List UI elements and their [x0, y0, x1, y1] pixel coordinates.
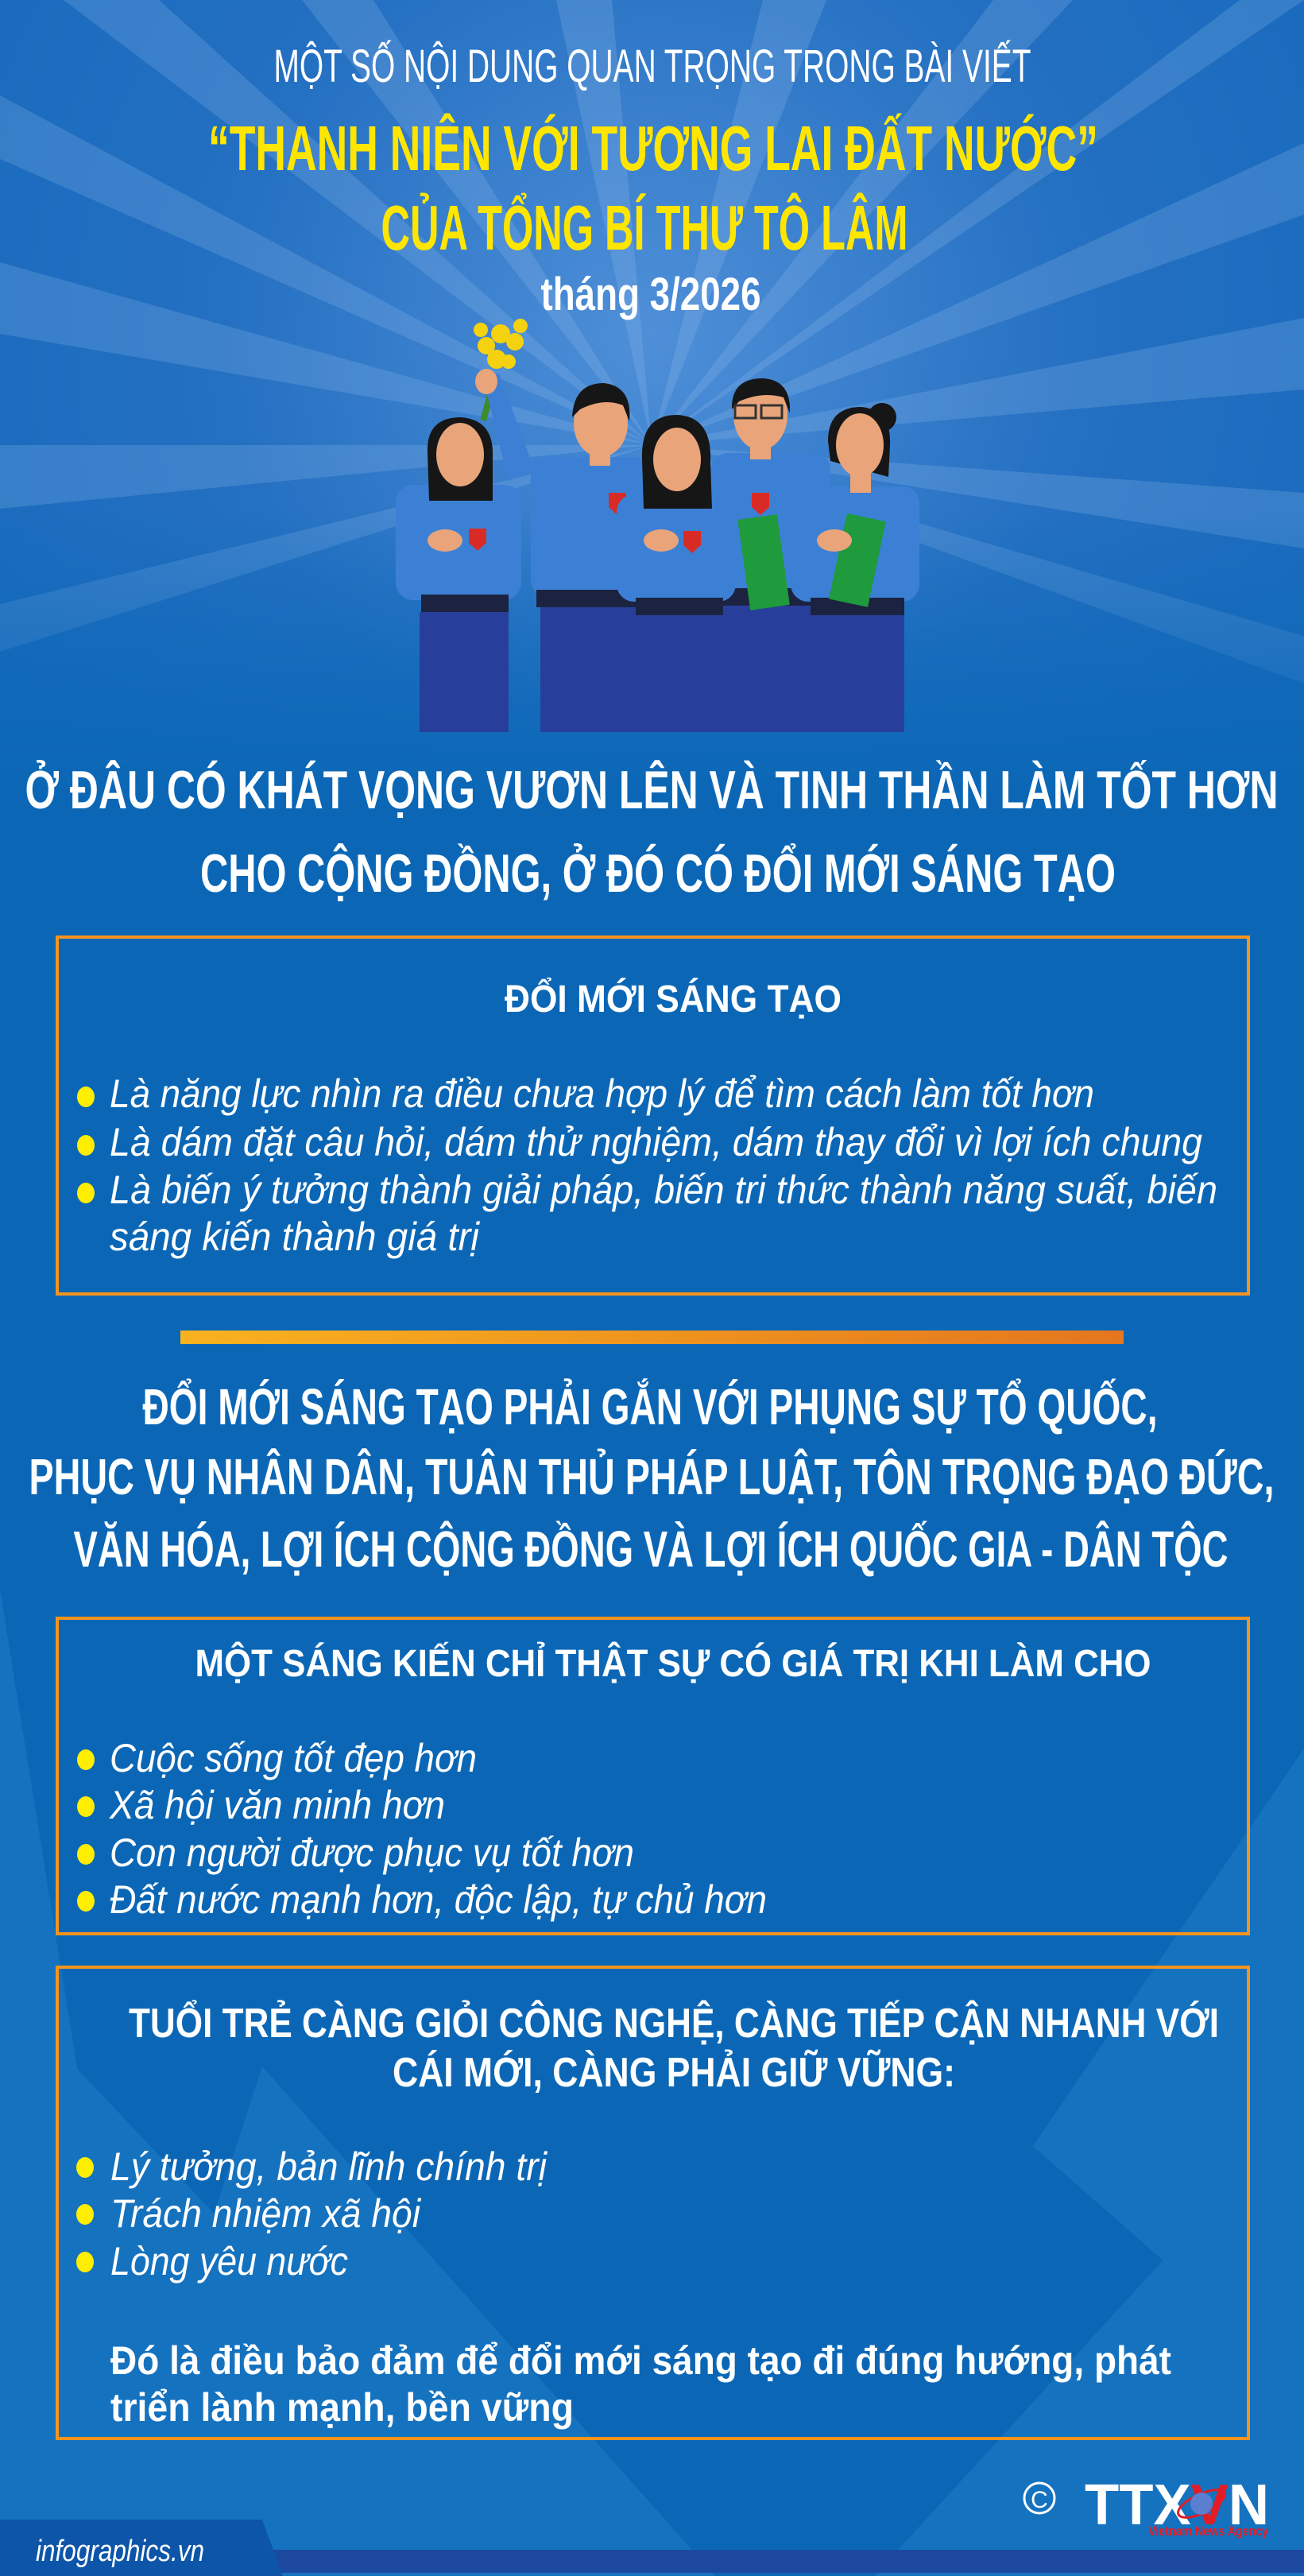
panel heading	[129, 2000, 1219, 2096]
footer source text: infographics.vn	[36, 2535, 204, 2568]
person 4 glasses with book	[711, 378, 830, 732]
title	[208, 113, 1098, 263]
person 5	[791, 403, 919, 732]
bullet list: Đất nước mạnh hơn, độc lập, tự chủ hơn	[110, 1877, 767, 1922]
divider bar	[180, 1331, 1124, 1344]
person 1	[396, 417, 521, 732]
bullet list: Là biến ý tưởng thành giải pháp, biến tri thức thành năng suất, biến	[110, 1168, 1217, 1212]
panel heading: CÁI MỚI, CÀNG PHẢI GIỮ VỮNG:	[393, 2049, 955, 2096]
logo: TTXVN: TTXVN	[1085, 2473, 1269, 2537]
bullet list: Trách nhiệm xã hội	[110, 2191, 422, 2236]
bullet list: Con người được phục vụ tốt hơn	[110, 1830, 634, 1875]
bullet list: sáng kiến thành giá trị	[110, 1214, 481, 1259]
person 3	[617, 415, 736, 732]
illustration: five youth union members	[396, 319, 919, 732]
bullet list: Lòng yêu nước	[110, 2239, 348, 2284]
person 2 raised arm	[475, 369, 650, 732]
title: CỦA TỔNG BÍ THƯ TÔ LÂM	[381, 192, 907, 263]
bullet list: Lý tưởng, bản lĩnh chính trị	[110, 2144, 548, 2189]
flowers	[474, 319, 528, 421]
heading 1	[25, 759, 1278, 904]
copyright symbol: C	[1031, 2487, 1048, 2513]
panel heading: MỘT SÁNG KIẾN CHỈ THẬT SỰ CÓ GIÁ TRỊ KHI LÀM CHO	[195, 1641, 1151, 1685]
copyright symbol	[1024, 2483, 1054, 2513]
panel: sáng kiến có giá trị	[57, 1618, 1248, 1934]
panel: đổi mới sáng tạo	[57, 937, 1248, 1294]
bullet list: Là dám đặt câu hỏi, dám thử nghiệm, dám thay đổi vì lợi ích chung	[110, 1120, 1202, 1164]
bullet list	[77, 1736, 767, 1922]
bullet list: Cuộc sống tốt đẹp hơn	[110, 1736, 477, 1780]
date: tháng 3/2026	[540, 269, 761, 320]
logo: TTXVN: Vietnam News Agency	[1148, 2524, 1268, 2539]
heading 2	[29, 1377, 1275, 1578]
closing statement	[110, 2338, 1171, 2430]
closing statement: triển lành mạnh, bền vững	[110, 2385, 574, 2430]
bullet list	[76, 2144, 548, 2284]
panel heading: ĐỔI MỚI SÁNG TẠO	[505, 977, 842, 1021]
bullet list: Xã hội văn minh hơn	[109, 1783, 445, 1827]
bullet list	[77, 1071, 1217, 1259]
footer band	[0, 2520, 1304, 2576]
panel: tuổi trẻ giữ vững	[57, 1967, 1248, 2438]
bullet list: Là năng lực nhìn ra điều chưa hợp lý để tìm cách làm tốt hơn	[110, 1071, 1094, 1116]
closing statement: Đó là điều bảo đảm để đổi mới sáng tạo đi đúng hướng, phát	[110, 2338, 1171, 2383]
